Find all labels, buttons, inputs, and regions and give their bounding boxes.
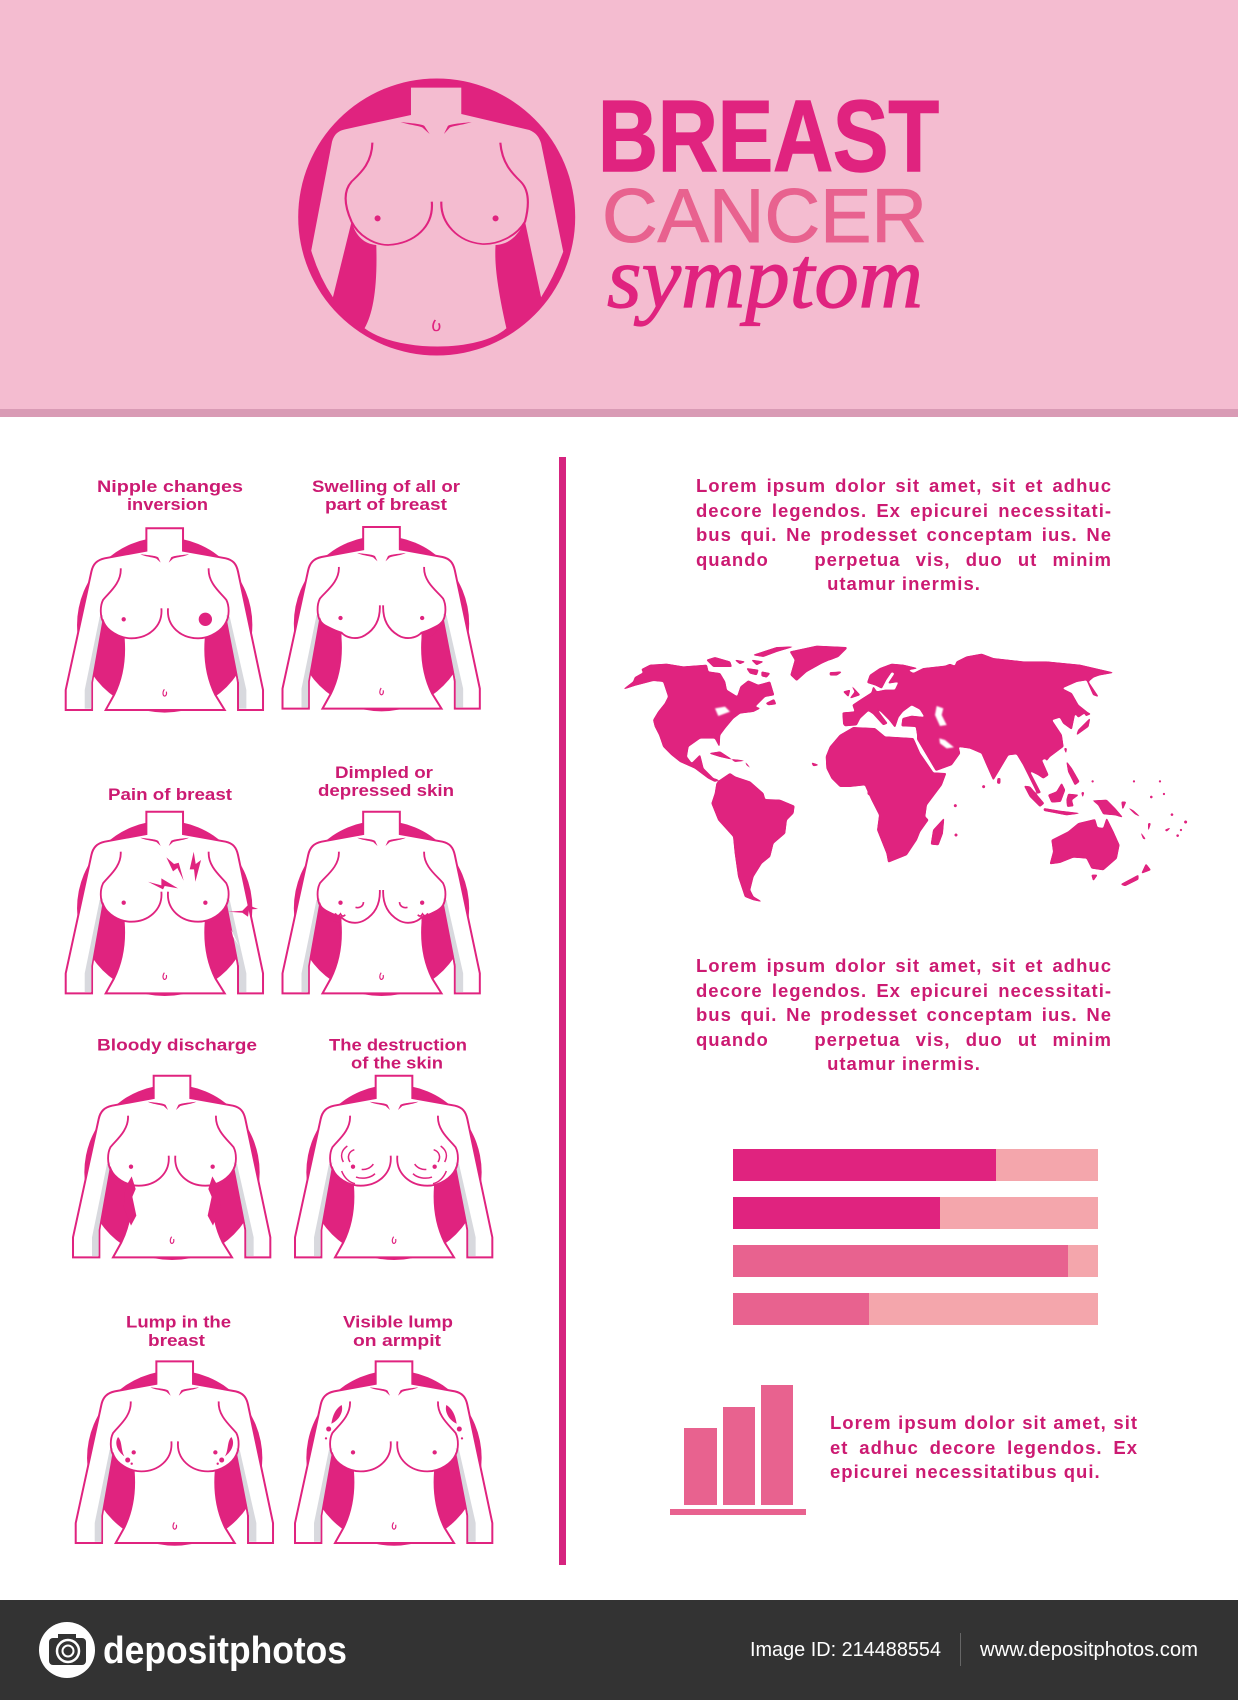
text block: paragraph two: bus qui. Ne prodesset conceptam ius. Ne xyxy=(696,1004,1112,1025)
symptom: swelling: part of breast xyxy=(325,495,447,514)
footer image id: Image ID: 214488554 xyxy=(750,1639,941,1661)
symptom: bloody discharge xyxy=(73,1036,270,1260)
symptom: swelling xyxy=(283,477,480,711)
footer brand name: depositphotos xyxy=(103,1630,347,1672)
header band xyxy=(0,0,1238,417)
symptom: lump in the breast: breast xyxy=(148,1331,205,1350)
text block: paragraph one: utamur inermis. xyxy=(827,573,981,594)
text block: paragraph two xyxy=(696,955,1112,1074)
world map xyxy=(623,646,1187,902)
symptom: visible lump on armpit: Visible lump xyxy=(343,1312,453,1332)
text block: paragraph three: epicurei necessitatibus qui. xyxy=(830,1461,1101,1482)
text block: paragraph one: bus qui. Ne prodesset conceptam ius. Ne xyxy=(696,524,1112,545)
header emblem: torso in circle xyxy=(298,78,575,356)
symptom: nipple changes: Nipple changes xyxy=(97,477,243,496)
footer bar xyxy=(0,1600,1238,1700)
symptom: nipple changes xyxy=(66,477,263,713)
footer logo icon xyxy=(39,1622,95,1678)
symptom: visible lump on armpit: on armpit xyxy=(353,1331,441,1350)
title: CANCER: CANCER xyxy=(602,174,927,259)
symptom: nipple changes: inversion xyxy=(127,495,208,514)
text block: paragraph two: quando perpetua vis, duo ut minim xyxy=(696,1028,1112,1050)
title: BREAST: BREAST xyxy=(598,81,939,193)
text block: paragraph two: Lorem ipsum dolor sit amet, sit et adhuc xyxy=(696,955,1112,976)
text block: paragraph two: utamur inermis. xyxy=(827,1053,981,1074)
text block: paragraph two: decore legendos. Ex epicurei necessitati- xyxy=(696,980,1112,1000)
symptom: dimpled skin xyxy=(283,763,480,996)
horizontal bar chart xyxy=(733,1149,1098,1325)
title: symptom: symptom xyxy=(607,230,923,327)
text block: paragraph one xyxy=(696,475,1112,594)
symptom: swelling: Swelling of all or xyxy=(312,477,460,496)
text block: paragraph three xyxy=(830,1412,1138,1482)
divider xyxy=(559,457,566,1565)
text block: paragraph one: decore legendos. Ex epicurei necessitati- xyxy=(696,500,1112,520)
symptom: dimpled skin: Dimpled or xyxy=(335,763,433,782)
text block: paragraph three: Lorem ipsum dolor sit amet, sit xyxy=(830,1412,1138,1433)
symptom: lump in the breast xyxy=(76,1312,273,1546)
symptom: destruction of the skin: The destruction xyxy=(329,1036,467,1054)
text block: paragraph one: Lorem ipsum dolor sit amet, sit et adhuc xyxy=(696,475,1112,496)
small column chart xyxy=(670,1385,806,1515)
footer url: www.depositphotos.com xyxy=(979,1639,1198,1661)
symptom: pain of breast xyxy=(66,785,263,996)
symptom: bloody discharge: Bloody discharge xyxy=(97,1036,257,1054)
symptom: destruction of the skin: of the skin xyxy=(351,1054,443,1072)
symptom: visible lump on armpit xyxy=(295,1312,492,1546)
text block: paragraph one: quando perpetua vis, duo ut minim xyxy=(696,548,1112,570)
text block: paragraph three: et adhuc decore legendos. Ex xyxy=(830,1436,1138,1458)
symptom: dimpled skin: depressed skin xyxy=(318,781,454,800)
symptom: lump in the breast: Lump in the xyxy=(126,1312,231,1332)
symptom: destruction of the skin xyxy=(295,1036,492,1260)
symptom: pain of breast: Pain of breast xyxy=(108,785,232,804)
